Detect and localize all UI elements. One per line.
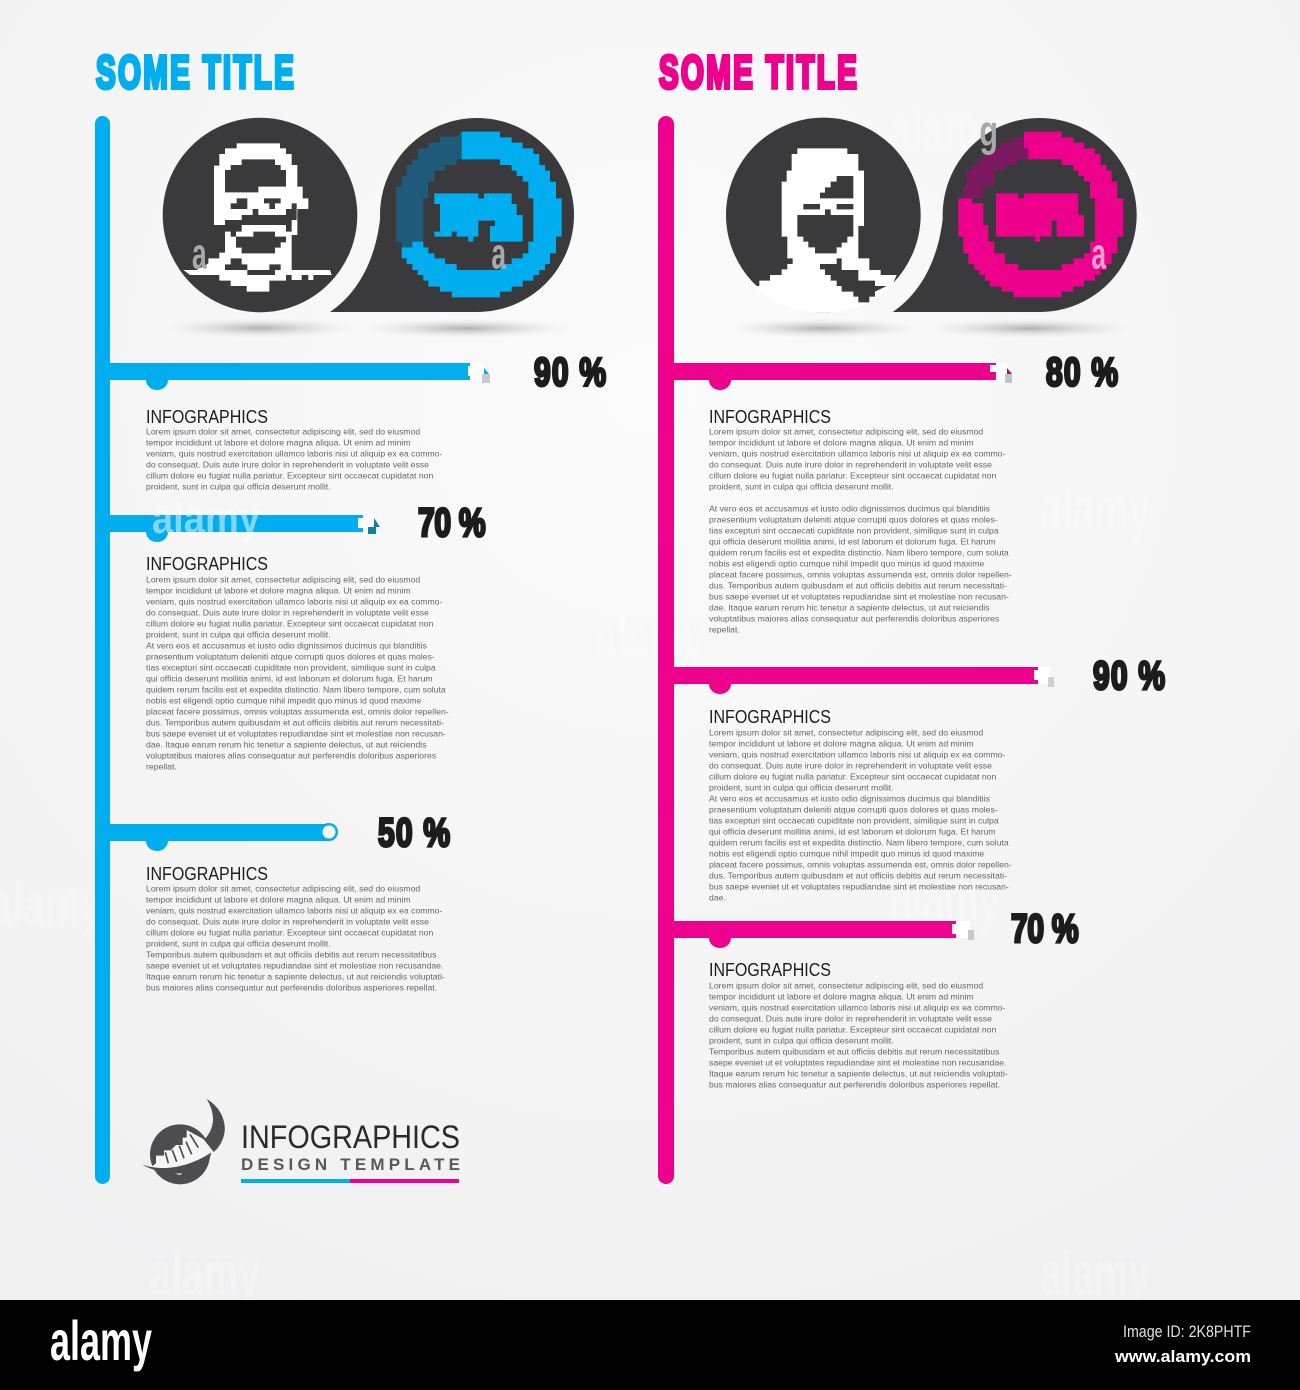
- bar: 50 percent: 50 %: [378, 811, 450, 855]
- text block 2: voluptatibus maiores alias consequatur aut perferendis doloribus asperiores: [146, 750, 437, 760]
- text block 3: Lorem ipsum dolor sit amet, consectetur adipiscing elit, sed do eiusmod: [146, 884, 420, 894]
- watermarks: alamy: [595, 605, 705, 674]
- text block 5: INFOGRAPHICS: [709, 707, 831, 727]
- text block 4: INFOGRAPHICS: [709, 407, 831, 427]
- text block 2: veniam, quis nostrud exercitation ullamco laboris nisi ut aliquip ex ea commo-: [146, 596, 442, 606]
- text block 3: [146, 864, 445, 992]
- text block 5: [709, 707, 1012, 902]
- text block 1: [146, 407, 442, 492]
- text block 5: do consequat. Duis aute irure dolor in reprehenderit in voluptate velit esse: [709, 760, 992, 770]
- text block 4: nobis est eligendi optio cumque nihil impedit quo minus id quod maxime: [709, 558, 984, 568]
- panel: left column: [95, 48, 606, 1184]
- text block 6: Itaque earum rerum hic tenetur a sapiente delectus, ut aut reiciendis voluptati-: [709, 1068, 1008, 1078]
- timeline: left vertical line: [95, 116, 110, 1184]
- bar: 90 percent: 90 %: [534, 350, 606, 395]
- avatar: man: a: [192, 230, 207, 278]
- text block 2: nobis est eligendi optio cumque nihil impedit quo minus id quod maxime: [146, 696, 421, 706]
- text block 6: do consequat. Duis aute irure dolor in reprehenderit in voluptate velit esse: [709, 1014, 992, 1024]
- watermarks: alamy: [890, 95, 1000, 164]
- text block 1: INFOGRAPHICS: [146, 407, 268, 427]
- footer: alamy bar: alamy: [50, 1309, 152, 1372]
- watermarks: [0, 95, 1150, 1309]
- text block 4: proident, sunt in culpa qui officia deserunt mollit.: [709, 482, 894, 492]
- text block 5: qui officia deserunt mollitia animi, id est laborum et dolorum fuga. Et harum: [709, 826, 996, 836]
- text block 6: [709, 960, 1008, 1090]
- text block 2: dae. Itaque earum rerum hic tenetur a sapiente delectus, ut aut reiciendis: [146, 740, 427, 750]
- text block 5: dae.: [709, 892, 726, 902]
- text block 1: proident, sunt in culpa qui officia deserunt mollit.: [146, 482, 331, 492]
- text block 4: bus saepe eveniet ut et voluptates repudiandae sint et molestiae non recusan-: [709, 592, 1009, 602]
- text block 3: do consequat. Duis aute irure dolor in reprehenderit in voluptate velit esse: [146, 916, 429, 926]
- text block 4: At vero eos et accusamus et iusto odio dignissimos ducimus qui blanditiis: [709, 504, 991, 514]
- text block 4: veniam, quis nostrud exercitation ullamco laboris nisi ut aliquip ex ea commo-: [709, 448, 1005, 458]
- logo: infographics design template: [142, 1099, 460, 1184]
- bar: 80 percent: [668, 350, 1118, 395]
- text block 2: tempor incididunt ut labore et dolore magna aliqua. Ut enim ad minim: [146, 586, 411, 596]
- watermarks: alamy: [150, 1240, 260, 1309]
- text block 3: tempor incididunt ut labore et dolore magna aliqua. Ut enim ad minim: [146, 894, 411, 904]
- bar: 70 percent right: [668, 907, 1078, 951]
- text block 6: INFOGRAPHICS: [709, 960, 831, 980]
- text block 5: bus saepe eveniet ut et voluptates repudiandae sint et molestiae non recusan-: [709, 882, 1009, 892]
- text block 6: tempor incididunt ut labore et dolore magna aliqua. Ut enim ad minim: [709, 992, 974, 1002]
- bar: 90 percent right: 90 %: [1093, 654, 1165, 698]
- text block 6: proident, sunt in culpa qui officia deserunt mollit.: [709, 1036, 894, 1046]
- bar: 70 percent right: 70 %: [1011, 907, 1079, 951]
- text block 6: saepe eveniet ut et voluptates repudiandae sint et molestiae non recusandae.: [709, 1058, 1006, 1068]
- text block 3: INFOGRAPHICS: [146, 864, 268, 884]
- text block 5: quidem rerum facilis est et expedita distinctio. Nam libero tempore, cum soluta: [709, 838, 1009, 848]
- text block 5: praesentium voluptatum deleniti atque corrupti quos dolores et quas moles-: [709, 804, 998, 814]
- logo: infographics design template: INFOGRAPHICS: [241, 1119, 460, 1155]
- bar: 70 percent: [105, 494, 486, 545]
- text block 5: Lorem ipsum dolor sit amet, consectetur adipiscing elit, sed do eiusmod: [709, 728, 983, 738]
- text block 2: repellat.: [146, 762, 177, 772]
- timeline: right vertical line: [658, 116, 674, 1184]
- text block 3: Itaque earum rerum hic tenetur a sapiente delectus, ut aut reiciendis voluptati-: [146, 972, 445, 982]
- avatar: man: [160, 118, 360, 338]
- text block 2: dus. Temporibus autem quibusdam et aut officiis debitis aut rerum necessitati-: [146, 718, 444, 728]
- text block 4: quidem rerum facilis est et expedita distinctio. Nam libero tempore, cum soluta: [709, 548, 1009, 558]
- text block 3: bus maiores alias consequatur aut perferendis doloribus asperiores repellat.: [146, 982, 437, 992]
- text block 4: [709, 407, 1012, 634]
- text block 2: do consequat. Duis aute irure dolor in reprehenderit in voluptate velit esse: [146, 608, 429, 618]
- text block 4: repellat.: [709, 624, 740, 634]
- bar: 90 percent right: [668, 654, 1165, 698]
- text block 2: placeat facere possimus, omnis voluptas assumenda est, omnis dolor repellen-: [146, 706, 449, 716]
- watermarks: alamy: [1040, 475, 1150, 544]
- watermarks: alamy: [1040, 1240, 1150, 1309]
- avatar: woman: [723, 118, 923, 338]
- footer: alamy bar: [0, 1300, 1300, 1390]
- text block 4: dae. Itaque earum rerum hic tenetur a sapiente delectus, ut aut reiciendis: [709, 602, 990, 612]
- bar: 70 percent: 70 %: [418, 501, 486, 545]
- title: right: SOME TITLE: [659, 48, 857, 99]
- bar: 50 percent: [105, 811, 450, 855]
- text block 5: cillum dolore eu fugiat nulla pariatur. Excepteur sint occaecat cupidatat non: [709, 772, 996, 782]
- text block 6: bus maiores alias consequatur aut perferendis doloribus asperiores repellat.: [709, 1080, 1000, 1090]
- text block 2: cillum dolore eu fugiat nulla pariatur. Excepteur sint occaecat cupidatat non: [146, 618, 433, 628]
- text block 5: dus. Temporibus autem quibusdam et aut officiis debitis aut rerum necessitati-: [709, 870, 1007, 880]
- text block 1: Lorem ipsum dolor sit amet, consectetur adipiscing elit, sed do eiusmod: [146, 426, 420, 436]
- text block 2: qui officia deserunt mollitia animi, id est laborum et dolorum fuga. Et harum: [146, 674, 433, 684]
- icon: logo mark: [142, 1099, 225, 1184]
- text block 5: tempor incididunt ut labore et dolore magna aliqua. Ut enim ad minim: [709, 738, 974, 748]
- title: left: SOME TITLE: [96, 48, 294, 99]
- text block 5: placeat facere possimus, omnis voluptas assumenda est, omnis dolor repellen-: [709, 860, 1012, 870]
- text block 6: Lorem ipsum dolor sit amet, consectetur adipiscing elit, sed do eiusmod: [709, 980, 983, 990]
- text block 2: [146, 554, 449, 772]
- text block 4: praesentium voluptatum deleniti atque corrupti quos dolores et quas moles-: [709, 514, 998, 524]
- donut chart: pink speech bubble: a: [1091, 230, 1107, 278]
- text block 5: veniam, quis nostrud exercitation ullamco laboris nisi ut aliquip ex ea commo-: [709, 750, 1005, 760]
- text block 4: placeat facere possimus, omnis voluptas assumenda est, omnis dolor repellen-: [709, 570, 1012, 580]
- text block 4: qui officia deserunt mollitia animi, id est laborum et dolorum fuga. Et harum: [709, 536, 996, 546]
- text block 3: cillum dolore eu fugiat nulla pariatur. Excepteur sint occaecat cupidatat non: [146, 928, 433, 938]
- donut chart: blue speech bubble: a: [491, 230, 507, 278]
- text block 2: bus saepe eveniet ut et voluptates repudiandae sint et molestiae non recusan-: [146, 728, 446, 738]
- text block 2: quidem rerum facilis est et expedita distinctio. Nam libero tempore, cum soluta: [146, 684, 446, 694]
- text block 2: tias excepturi sint occaecati cupiditate non provident, similique sunt in culpa: [146, 662, 436, 672]
- panel: right column: [658, 48, 1165, 1184]
- text block 2: praesentium voluptatum deleniti atque corrupti quos dolores et quas moles-: [146, 652, 435, 662]
- logo: infographics design template: DESIGN TEMPLATE: [241, 1155, 460, 1174]
- text block 3: Temporibus autem quibusdam et aut officiis debitis aut rerum necessitatibus: [146, 950, 437, 960]
- bar: 70 percent: alamy: [152, 494, 260, 543]
- text block 1: veniam, quis nostrud exercitation ullamco laboris nisi ut aliquip ex ea commo-: [146, 448, 442, 458]
- text block 5: At vero eos et accusamus et iusto odio dignissimos ducimus qui blanditiis: [709, 794, 991, 804]
- text block 6: cillum dolore eu fugiat nulla pariatur. Excepteur sint occaecat cupidatat non: [709, 1024, 996, 1034]
- bar: 80 percent: 80 %: [1046, 350, 1118, 395]
- text block 5: tias excepturi sint occaecati cupiditate non provident, similique sunt in culpa: [709, 816, 999, 826]
- text block 4: dus. Temporibus autem quibusdam et aut officiis debitis aut rerum necessitati-: [709, 580, 1007, 590]
- text block 2: At vero eos et accusamus et iusto odio dignissimos ducimus qui blanditiis: [146, 640, 428, 650]
- footer: alamy bar: Image ID: 2K8PHTF: [1123, 1322, 1251, 1341]
- footer: alamy bar: www.alamy.com: [1114, 1347, 1251, 1366]
- text block 4: tempor incididunt ut labore et dolore magna aliqua. Ut enim ad minim: [709, 438, 974, 448]
- text block 4: tias excepturi sint occaecati cupiditate non provident, similique sunt in culpa: [709, 526, 999, 536]
- text block 5: proident, sunt in culpa qui officia deserunt mollit.: [709, 782, 894, 792]
- text block 5: nobis est eligendi optio cumque nihil impedit quo minus id quod maxime: [709, 848, 984, 858]
- text block 4: cillum dolore eu fugiat nulla pariatur. Excepteur sint occaecat cupidatat non: [709, 470, 996, 480]
- text block 3: proident, sunt in culpa qui officia deserunt mollit.: [146, 938, 331, 948]
- text block 6: Temporibus autem quibusdam et aut officiis debitis aut rerum necessitatibus: [709, 1046, 1000, 1056]
- text block 4: voluptatibus maiores alias consequatur aut perferendis doloribus asperiores: [709, 614, 1000, 624]
- text block 1: tempor incididunt ut labore et dolore magna aliqua. Ut enim ad minim: [146, 438, 411, 448]
- text block 2: INFOGRAPHICS: [146, 554, 268, 574]
- text block 1: cillum dolore eu fugiat nulla pariatur. Excepteur sint occaecat cupidatat non: [146, 470, 433, 480]
- text block 1: do consequat. Duis aute irure dolor in reprehenderit in voluptate velit esse: [146, 460, 429, 470]
- text block 2: proident, sunt in culpa qui officia deserunt mollit.: [146, 630, 331, 640]
- text block 6: veniam, quis nostrud exercitation ullamco laboris nisi ut aliquip ex ea commo-: [709, 1002, 1005, 1012]
- donut chart: blue speech bubble: [330, 118, 577, 338]
- text block 3: veniam, quis nostrud exercitation ullamco laboris nisi ut aliquip ex ea commo-: [146, 906, 442, 916]
- donut chart: pink speech bubble: g: [979, 108, 998, 156]
- watermarks: alamy: [890, 865, 1000, 934]
- text block 4: do consequat. Duis aute irure dolor in reprehenderit in voluptate velit esse: [709, 460, 992, 470]
- text block 4: Lorem ipsum dolor sit amet, consectetur adipiscing elit, sed do eiusmod: [709, 426, 983, 436]
- text block 3: saepe eveniet ut et voluptates repudiandae sint et molestiae non recusandae.: [146, 960, 443, 970]
- donut chart: pink speech bubble: [893, 108, 1137, 338]
- text block 2: Lorem ipsum dolor sit amet, consectetur adipiscing elit, sed do eiusmod: [146, 574, 420, 584]
- bar: 90 percent: [105, 350, 606, 395]
